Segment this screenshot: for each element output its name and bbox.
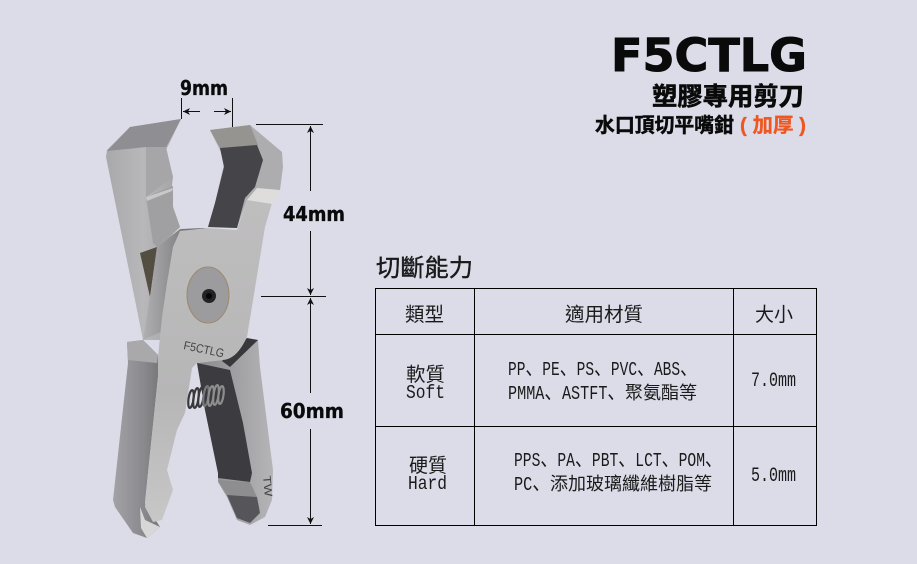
left jaw and arm — [106, 119, 205, 340]
front plate with F5CTLG engraving: TW — [260, 475, 274, 498]
header row: 適用材質 — [565, 304, 643, 327]
subtitle: flush cutter with thickened tag — [595, 113, 806, 137]
soft row: 軟質 — [406, 364, 445, 387]
product title: F5CTLG — [611, 29, 807, 82]
subtitle: flush cutter with thickened tag: 水口頂切平嘴鉗 — [595, 113, 734, 137]
soft row — [406, 357, 796, 406]
table grid — [376, 288, 816, 526]
spring — [187, 385, 225, 408]
dimension: 44mm — [256, 124, 345, 296]
hard row: 添加玻璃纖維樹脂等 — [550, 474, 712, 496]
dimension: 9mm: 9mm — [180, 76, 228, 100]
dimension: 44mm: 44mm — [283, 202, 345, 226]
cutting capacity heading: 切斷能力 — [376, 255, 473, 282]
subtitle: flush cutter with thickened tag: ( 加厚 ) — [740, 114, 806, 137]
hard row: 5.0mm — [751, 465, 796, 488]
hard row: PC、 — [514, 472, 550, 497]
header row: 類型 — [405, 304, 444, 327]
hard row — [408, 448, 796, 497]
dimension: 9mm — [180, 76, 232, 127]
soft row: PP、PE、PS、PVC、ABS、 — [508, 357, 697, 382]
header row — [405, 304, 793, 327]
header row: 大小 — [755, 304, 793, 327]
right jaw — [208, 125, 283, 228]
right handle — [197, 338, 273, 525]
dimension: 60mm: 60mm — [280, 399, 344, 423]
soft row: 聚氨酯等 — [625, 383, 697, 405]
subtitle: plastic cutting blade: 塑膠專用剪刀 — [652, 83, 804, 111]
soft row: 7.0mm — [751, 370, 796, 393]
soft row: PMMA、ASTFT、 — [508, 381, 625, 406]
front plate with F5CTLG engraving — [145, 188, 280, 522]
hard row: PPS、PA、PBT、LCT、POM、 — [514, 448, 722, 473]
front plate with F5CTLG engraving: F5CTLG — [182, 338, 225, 360]
left handle — [113, 340, 160, 538]
soft row: Soft — [406, 382, 445, 404]
hard row: 硬質 — [409, 455, 447, 478]
cutting capacity table — [376, 288, 816, 526]
hard row: Hard — [408, 473, 447, 495]
pliers photo illustration — [106, 119, 283, 538]
